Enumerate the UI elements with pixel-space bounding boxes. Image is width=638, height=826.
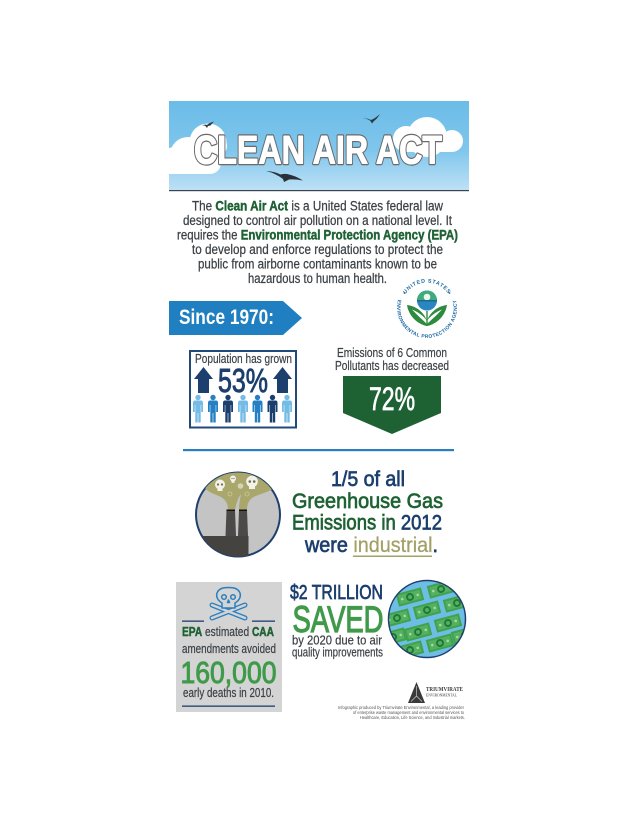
since 1970 arrow banner [169, 301, 302, 335]
icon: factory smoke [190, 472, 280, 561]
credit text: Healthcare, Education, Life Science, and Industrial markets. [360, 715, 465, 720]
smoke cloud [205, 472, 276, 510]
logo wordmark: TRIUMVIRATE [426, 686, 463, 693]
logo triangle [408, 682, 425, 703]
intro text block: hazardous to human health. [248, 271, 387, 286]
greenhouse gas statistic: Emissions in 2012 [292, 510, 442, 534]
intro text block: to develop and enforce regulations to protect the [192, 242, 443, 257]
greenhouse gas statistic: Greenhouse Gas [292, 489, 443, 513]
savings statistic: $2 TRILLION [290, 582, 383, 604]
savings statistic: SAVED [292, 599, 384, 640]
panel: population growth [190, 351, 296, 428]
people row [193, 395, 292, 422]
greenhouse gas statistic: were industrial. [304, 533, 438, 557]
early deaths text: early deaths in 2010. [183, 686, 274, 700]
savings statistic [290, 582, 384, 660]
bird: top right [363, 114, 380, 124]
intro text block: designed to control air pollution on a national level. It [183, 213, 452, 228]
intro text block: requires the Environmental Protection Agency (EPA) [177, 228, 458, 242]
72 percent figure: 72% [369, 381, 415, 417]
banner sky [169, 101, 469, 190]
credit text [338, 705, 465, 720]
icon: EPA seal: ENVIRONMENTAL PROTECTION AGENCY [397, 300, 457, 338]
panel: early deaths avoided [176, 582, 282, 712]
banner title: CLEAN AIR ACT [194, 128, 442, 172]
icon: EPA seal: UNITED STATES [402, 279, 450, 294]
down arrow [343, 376, 441, 434]
greenhouse gas statistic [292, 467, 443, 557]
icon: up arrow right [273, 367, 292, 393]
logo: Triumvirate Environmental [408, 682, 463, 703]
credit text: of enterprise waste management and environmental services to [353, 710, 465, 715]
EPA estimate text: EPA estimated CAA [182, 625, 274, 639]
emissions label: Emissions of 6 Common [337, 346, 447, 360]
panel: early deaths avoided: amendments avoided [182, 642, 276, 656]
intro text block [177, 198, 458, 286]
53 percent figure: 53% [218, 362, 268, 399]
divider right [252, 620, 275, 622]
bird: top left [202, 122, 214, 128]
intro text block: The Clean Air Act is a United States federal law [192, 198, 443, 214]
intro text block: public from airborne contaminants known to be [198, 256, 437, 272]
panel: emissions decrease [335, 346, 449, 434]
factory base [202, 536, 248, 556]
credit text: Infographic produced by Triumvirate Environmental, a leading provider [338, 705, 465, 710]
banner base line [169, 190, 469, 191]
icon: money circle [388, 580, 466, 658]
skulls [215, 476, 258, 491]
logo: Triumvirate Environmental: ENVIRONMENTAL [426, 692, 457, 698]
icon: up arrow left [194, 367, 213, 393]
banner: clean air act header [163, 101, 469, 191]
banner title: CLEAN AIR ACT [194, 128, 442, 172]
divider left [182, 620, 204, 622]
icon: EPA seal [397, 279, 457, 338]
savings statistic: quality improvements [292, 646, 383, 660]
since 1970 arrow banner: Since 1970: [179, 306, 274, 329]
bird: bottom [266, 171, 303, 182]
greenhouse gas statistic: 1/5 of all [331, 467, 405, 491]
icon: skull and crossbones [212, 588, 245, 618]
population label: Population has grown [195, 352, 292, 366]
panel: emissions decrease: Pollutants has decreased [335, 359, 449, 373]
160,000 figure: 160,000 [180, 655, 276, 690]
clouds [163, 117, 463, 174]
chimneys [226, 510, 236, 536]
savings statistic: by 2020 due to air [292, 634, 382, 648]
underline [353, 556, 432, 557]
